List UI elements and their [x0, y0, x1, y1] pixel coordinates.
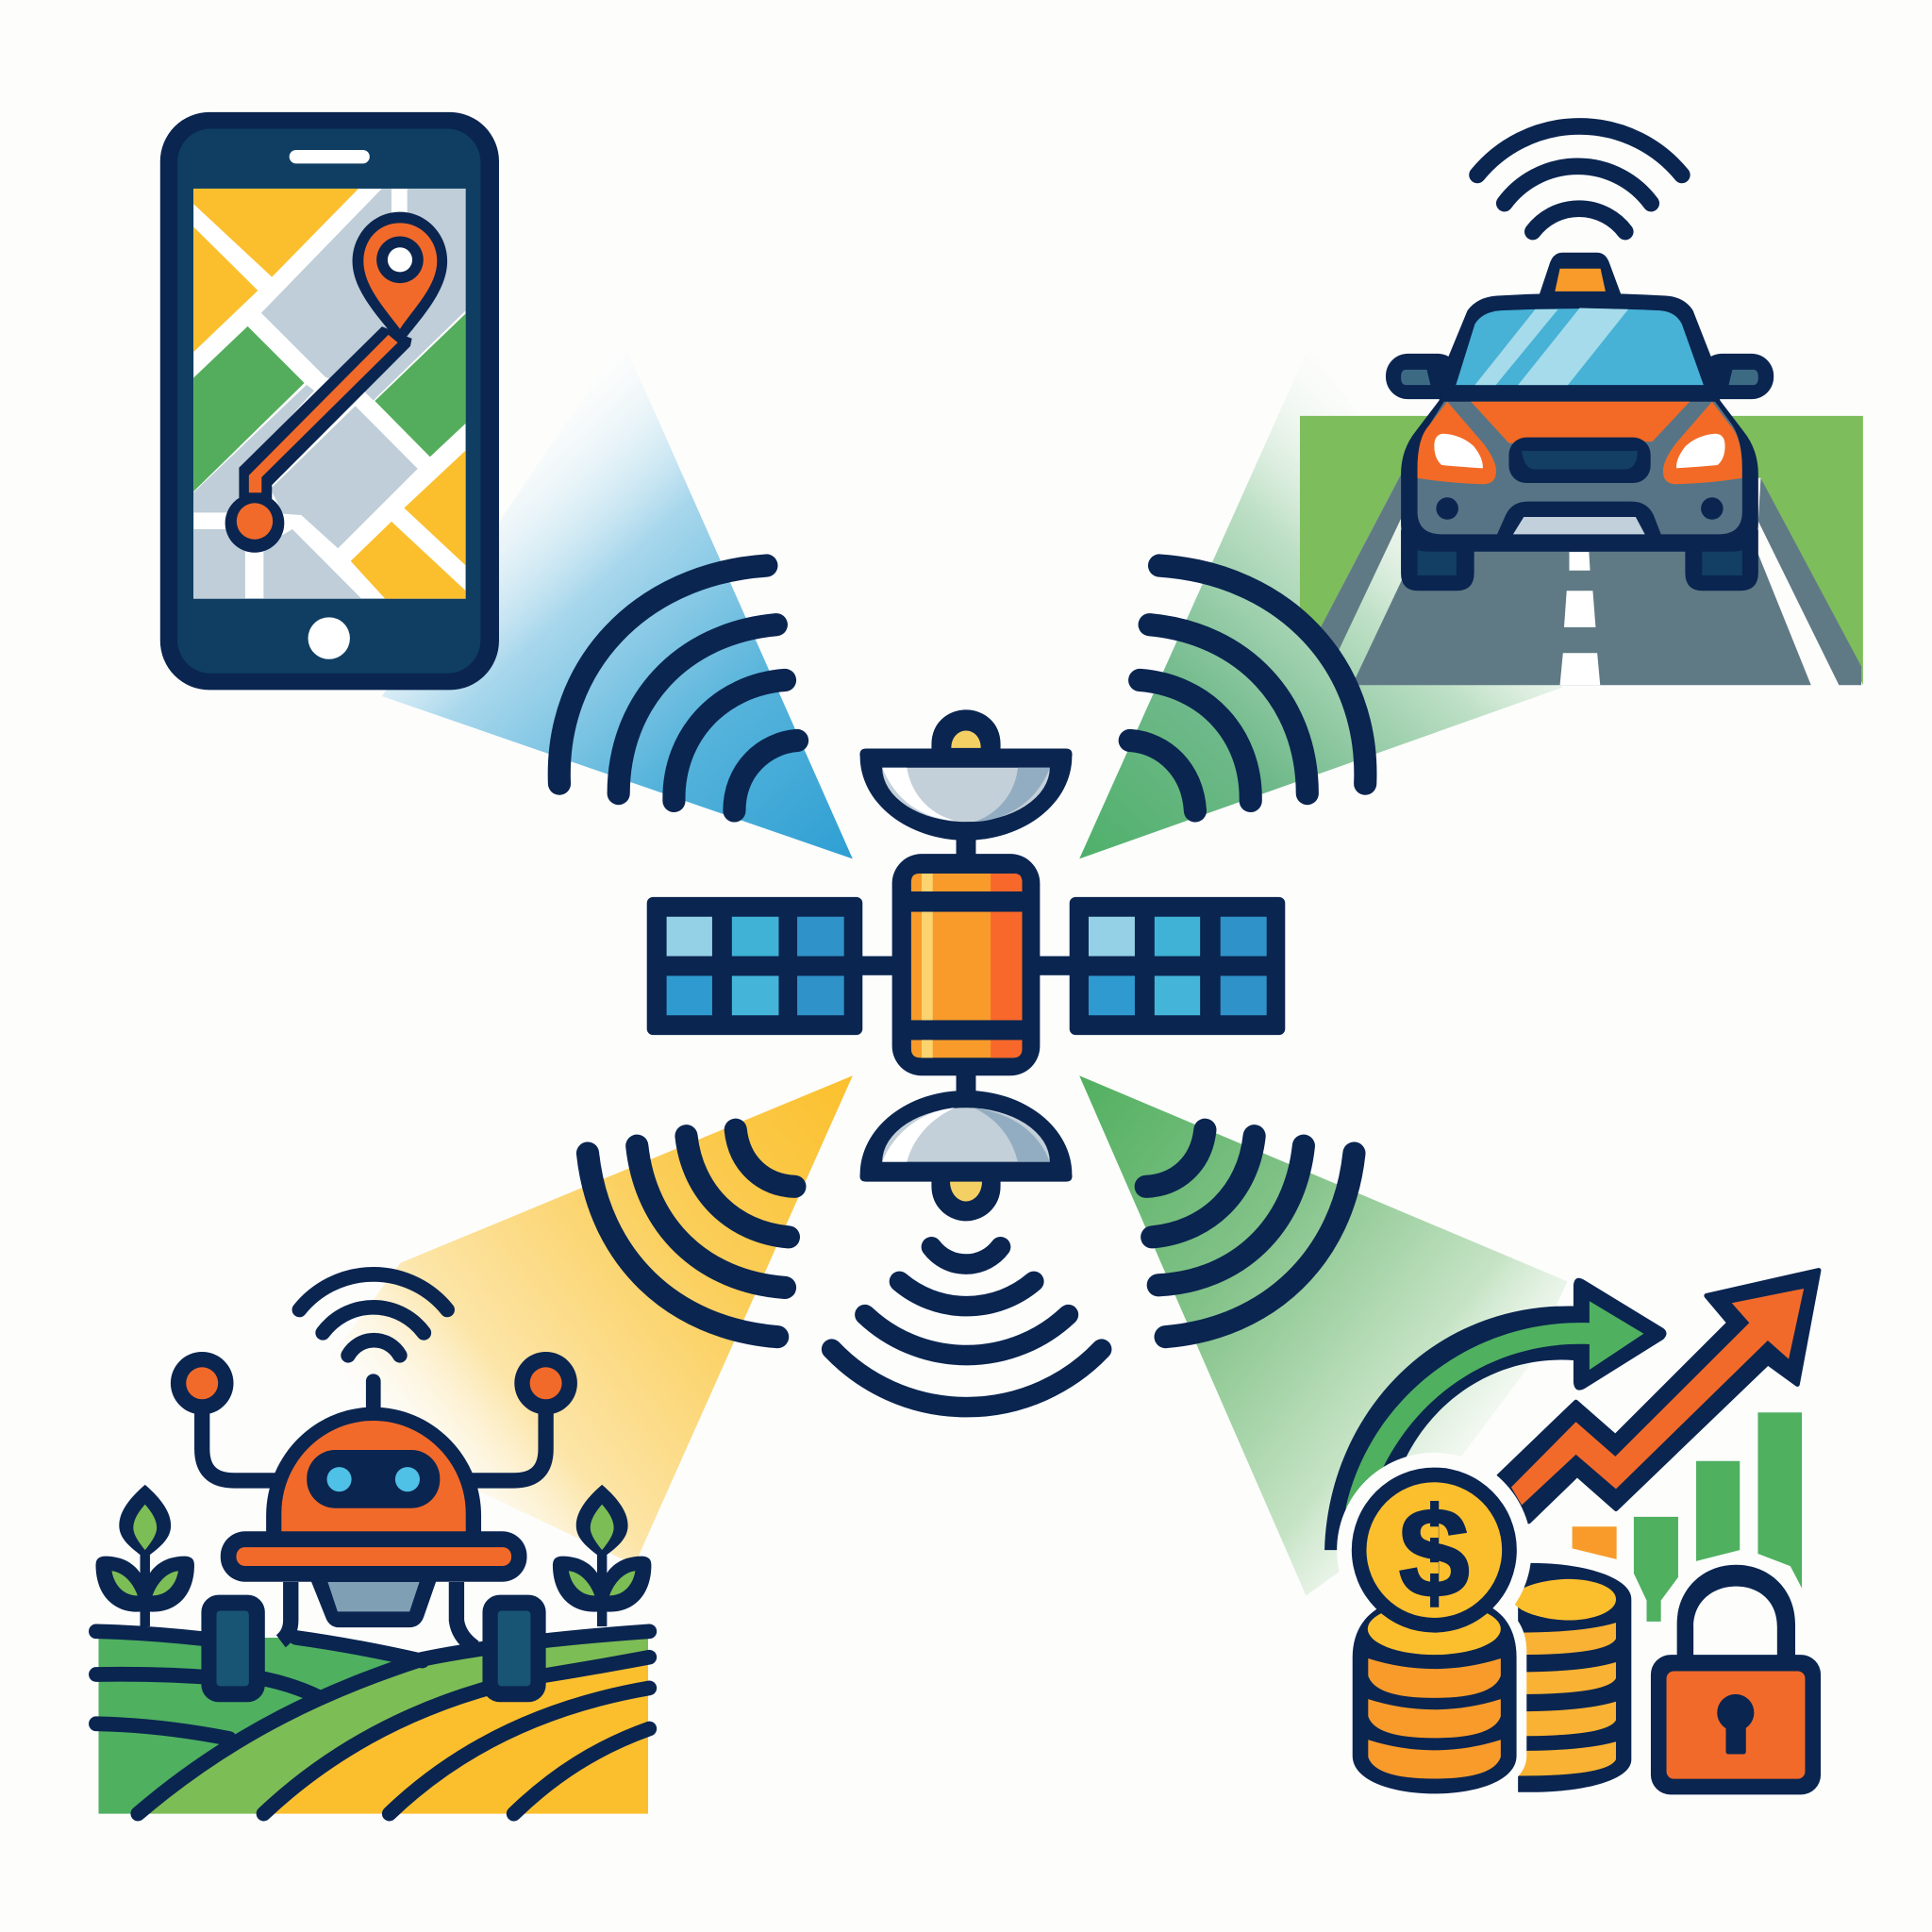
phone face: [177, 128, 480, 674]
plant right: [553, 1485, 651, 1626]
robot dome: [266, 1407, 481, 1541]
phone frame: [160, 112, 499, 690]
dollar coin: [1352, 1468, 1517, 1633]
car body: [1401, 293, 1758, 552]
speaker: [290, 150, 370, 163]
route line: [239, 326, 412, 504]
start marker: [225, 493, 284, 553]
phone with map: [160, 112, 499, 690]
arm sensors: [171, 1352, 577, 1415]
left solar panel: [647, 897, 862, 1035]
wifi signal above robot: [299, 1274, 447, 1356]
wheels: [1401, 530, 1758, 591]
top dish: [859, 709, 1073, 862]
satellite body: [892, 854, 1040, 1075]
green curved arrow: [1324, 1278, 1667, 1550]
farm robot scene: [95, 1274, 651, 1814]
signal arcs: top left: [559, 566, 797, 810]
home button: [308, 617, 350, 659]
signal arcs: top right: [1130, 566, 1365, 810]
connector bars: [857, 957, 1078, 975]
dollar coin: $: [1399, 1481, 1470, 1624]
front coin stack: [1343, 1599, 1526, 1801]
bar chart: [1573, 1412, 1802, 1622]
beam: green to car: [1079, 347, 1562, 858]
robot deck: [221, 1531, 526, 1582]
bottom dish: [859, 1067, 1073, 1221]
map screen: [193, 189, 466, 599]
road scene: [1300, 416, 1863, 685]
signal arcs: bottom right: [1146, 1130, 1354, 1337]
right solar panel: [1070, 897, 1285, 1035]
plant left: [95, 1485, 194, 1626]
back coin stack: [1513, 1563, 1631, 1792]
signal arcs: bottom left: [588, 1130, 794, 1337]
beam: blue to phone: [382, 339, 853, 858]
beacon: [1539, 253, 1622, 295]
robot wheels: [201, 1595, 546, 1702]
wifi signal above car: [1477, 126, 1682, 232]
car on road: [1300, 126, 1863, 685]
field furrow lines: [96, 1631, 649, 1814]
sensor pod: [310, 1579, 437, 1627]
orange growth arrow: [1499, 1271, 1819, 1522]
beam: green to finance: [1079, 1075, 1567, 1595]
coin halo: [1337, 1453, 1532, 1647]
mirrors: [1386, 354, 1774, 399]
beam: yellow to robot: [295, 1075, 853, 1565]
finance scene: [1324, 1271, 1821, 1801]
location pin: [353, 212, 447, 345]
satellite: [647, 709, 1285, 1221]
robot arms: [202, 1413, 546, 1647]
robot antenna: [366, 1374, 381, 1417]
signal arcs: bottom centre: [832, 1247, 1102, 1407]
lock: [1651, 1565, 1821, 1794]
field: [98, 1634, 648, 1814]
